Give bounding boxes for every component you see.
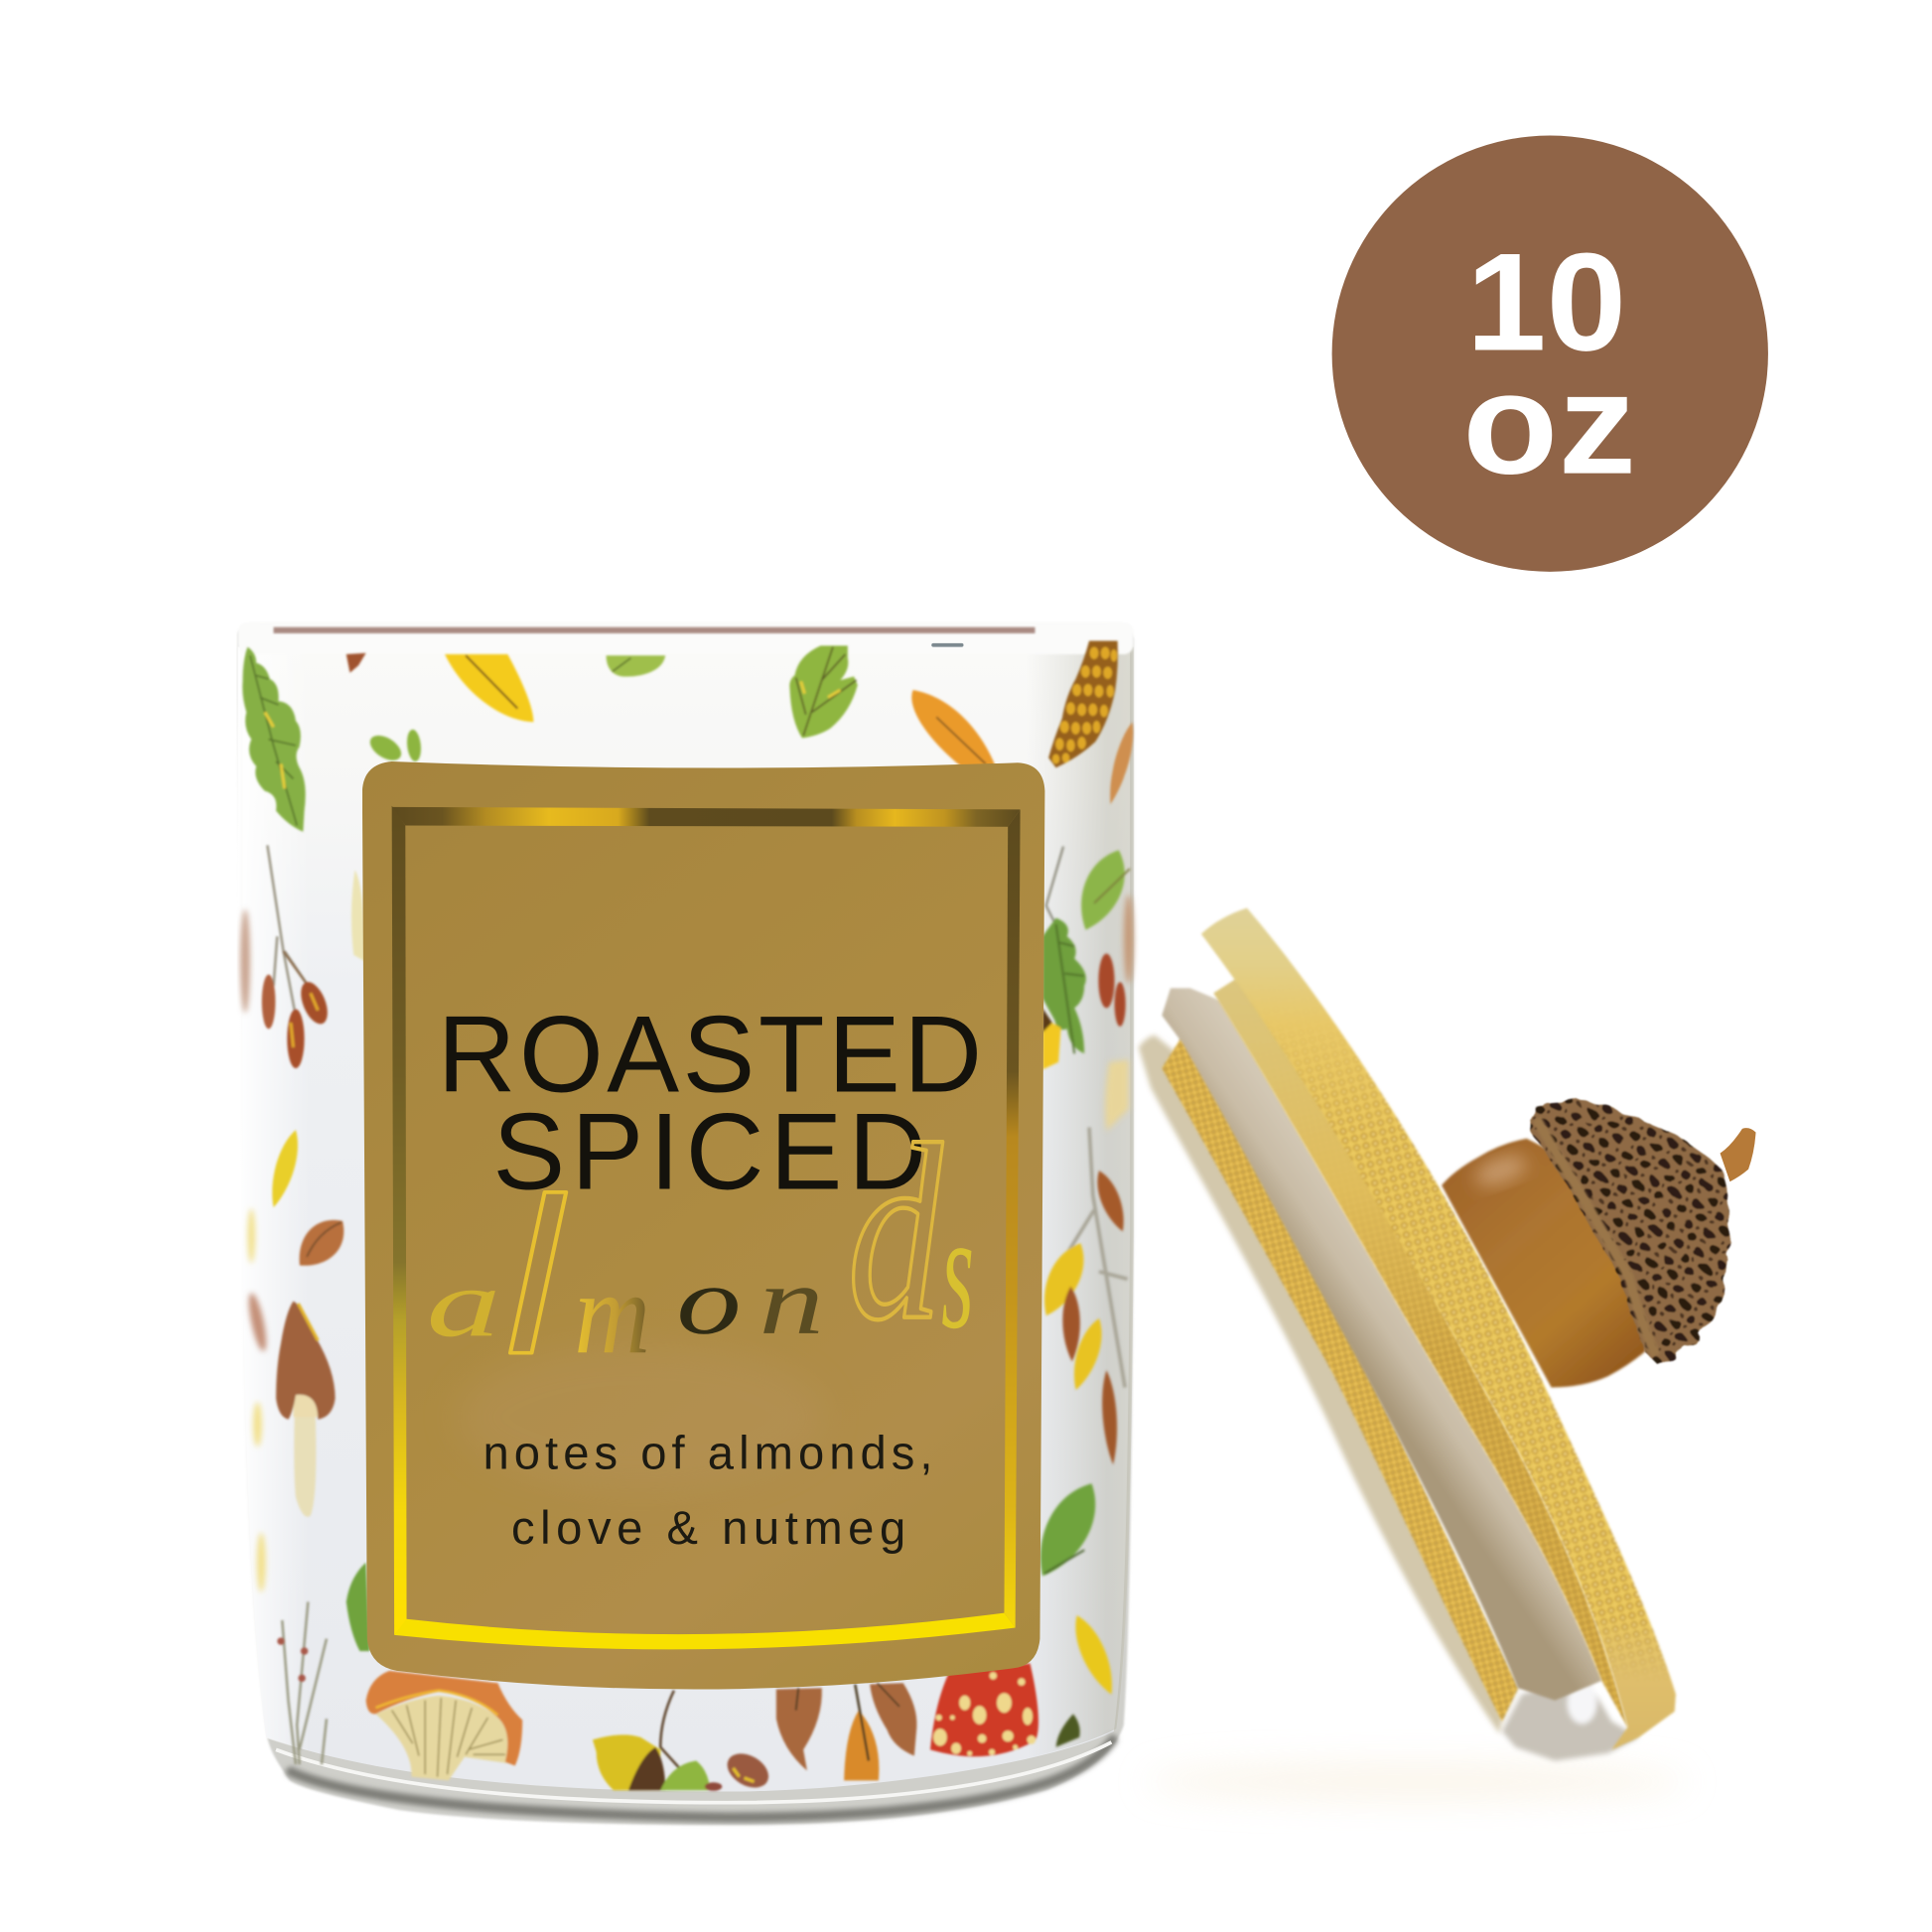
lid rubber ring [1502, 1681, 1639, 1760]
icon: dark green leaf [1025, 1473, 1110, 1586]
icon: blurred yellow marks [245, 1208, 270, 1591]
icon: yellow leaf with dark cap [1042, 1008, 1061, 1069]
lid lower bamboo disk [1162, 1035, 1518, 1722]
scent notes [483, 1426, 932, 1554]
title: roasted spiced: SPICED [492, 1092, 926, 1213]
script: almonds: d [848, 1092, 943, 1372]
floor shadow [1146, 1764, 1688, 1799]
candle jar [238, 622, 1139, 1825]
icon: pale leaf behind label [351, 870, 364, 961]
lid inner bamboo ring [1213, 973, 1627, 1727]
acorn stem [1721, 1128, 1756, 1181]
icon: blurred edge leaf [240, 909, 250, 1013]
icon: yellow leaf [1066, 1610, 1122, 1699]
icon: slim yellow leaf [264, 1127, 305, 1210]
size badge: 10 oz [1332, 136, 1768, 572]
lid lower rim [1139, 1035, 1518, 1733]
icon: blurred edge leaf [1124, 895, 1134, 983]
glass jar body [238, 624, 1134, 1825]
icon: small dark leaf [1056, 1714, 1080, 1747]
icon: leafy branch [1033, 1128, 1132, 1465]
icon: twig and oak leaf [1042, 847, 1086, 1053]
icon: slim brown leaf [1104, 720, 1139, 806]
icon: red berries [1098, 954, 1126, 1027]
patterned wrap [242, 647, 1130, 1792]
gold label [362, 761, 1044, 1690]
title: roasted spiced [438, 995, 982, 1213]
script: almonds: o [676, 1248, 742, 1354]
glass base shadow [291, 1739, 1113, 1818]
script: almonds: s [941, 1177, 974, 1363]
autumn illustrations: bottom band [366, 1663, 1038, 1794]
lid top bamboo disk [1201, 908, 1676, 1749]
icon: brown leaf [776, 1688, 822, 1770]
size badge: 10 oz: oz [1462, 344, 1636, 504]
autumn illustrations: left side [240, 845, 369, 1764]
title: roasted spiced: ROASTED [438, 995, 982, 1116]
icon: russet leaf [870, 1683, 916, 1756]
wrap side shading [238, 647, 1134, 1792]
autumn illustrations: upper band [242, 640, 1139, 961]
icon: acorn with twig [593, 1691, 722, 1791]
script: almonds: m [574, 1250, 650, 1379]
lid gasket [1162, 988, 1601, 1701]
jar rim [238, 622, 1134, 654]
icon: chanterelle mushroom [366, 1671, 522, 1780]
icon: green leaf behind label [346, 1563, 369, 1651]
icon: berries on twigs [277, 1637, 308, 1682]
scent notes: notes of almonds, [483, 1426, 932, 1478]
icon: green sprout [365, 729, 422, 765]
script: almonds: l [506, 1152, 567, 1400]
scent notes: clove & nutmeg [511, 1501, 905, 1554]
acorn nut [1442, 1139, 1657, 1387]
icon: clipped green leaf [607, 655, 665, 677]
glass highlight [276, 1742, 1111, 1803]
script: almonds: a [426, 1250, 500, 1357]
icon: yellow leaf [445, 654, 533, 722]
acorn knob [1442, 1102, 1756, 1387]
icon: small bud [346, 653, 366, 673]
icon: lobed green leaf [789, 645, 858, 738]
icon: brown hazelnut [722, 1746, 774, 1794]
foil frame [392, 806, 1021, 1649]
icon: pale lobed leaf [1105, 1059, 1129, 1131]
icon: green leaf [1068, 843, 1136, 937]
icon: twig [855, 1685, 869, 1760]
script: almonds [426, 1092, 974, 1400]
icon: pine cone [1048, 640, 1118, 767]
icon: brown mushroom [276, 1302, 336, 1517]
script: almonds: n [759, 1248, 824, 1354]
size badge: 10 oz: 10 [1466, 223, 1626, 379]
bamboo lid with acorn knob [1139, 908, 1756, 1760]
soft sheen on label [456, 1343, 826, 1491]
acorn cap [1529, 1102, 1729, 1364]
icon: brown leaf [287, 1209, 355, 1278]
icon: amanita mushroom [930, 1663, 1038, 1756]
icon: orange leaf [844, 1711, 879, 1780]
icon: bare twigs [282, 1601, 327, 1764]
autumn illustrations: right side [1025, 843, 1136, 1747]
icon: oak leaf [242, 647, 306, 832]
icon: orange leaf [911, 690, 996, 766]
icon: rosehip twig [262, 845, 333, 1068]
acorn cap rim [1537, 1119, 1656, 1355]
